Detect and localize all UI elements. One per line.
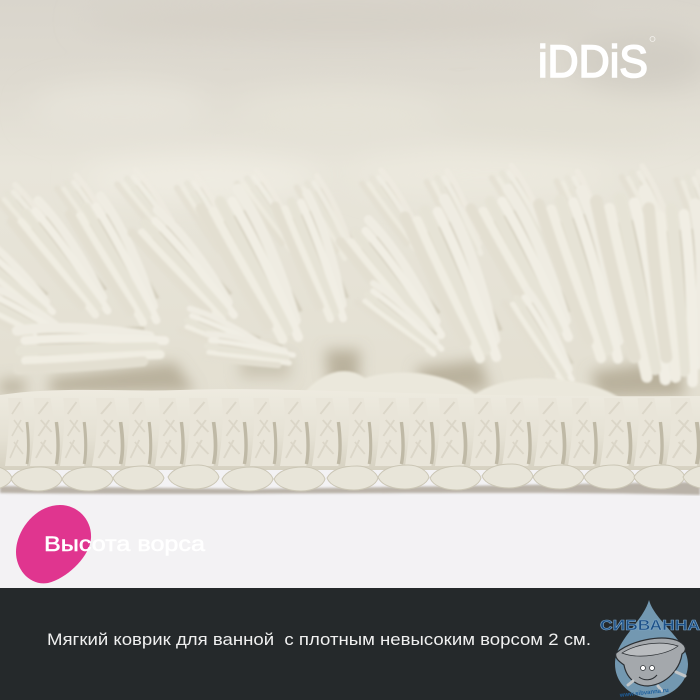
rug edge: stitched beads	[0, 464, 700, 491]
watermark url: www.sibvanna.ru	[619, 688, 669, 699]
heading: pile height: Высота ворса	[44, 533, 205, 556]
logo: iDDiS: iDDiS	[538, 36, 648, 87]
shadow gaps between tufts	[0, 350, 685, 398]
rug photo: soft blurred far pile	[0, 0, 700, 400]
rug hem: loose fibres above binding	[300, 371, 620, 398]
rug edge shadow	[0, 482, 700, 495]
footer band	[0, 588, 700, 700]
icon: bathtub mascot	[616, 638, 685, 691]
watermark: Sibvanna logo	[600, 600, 700, 699]
icon: water drop	[615, 600, 688, 698]
rug pile: yarn tufts	[0, 165, 700, 398]
rug binding: braided rope edge	[0, 389, 700, 470]
watermark name: СИБВАННА	[600, 617, 700, 634]
footer description: Мягкий коврик для ванной с плотным невысоким ворсом 2 см.	[47, 630, 591, 649]
accent: pink blob	[16, 505, 91, 583]
